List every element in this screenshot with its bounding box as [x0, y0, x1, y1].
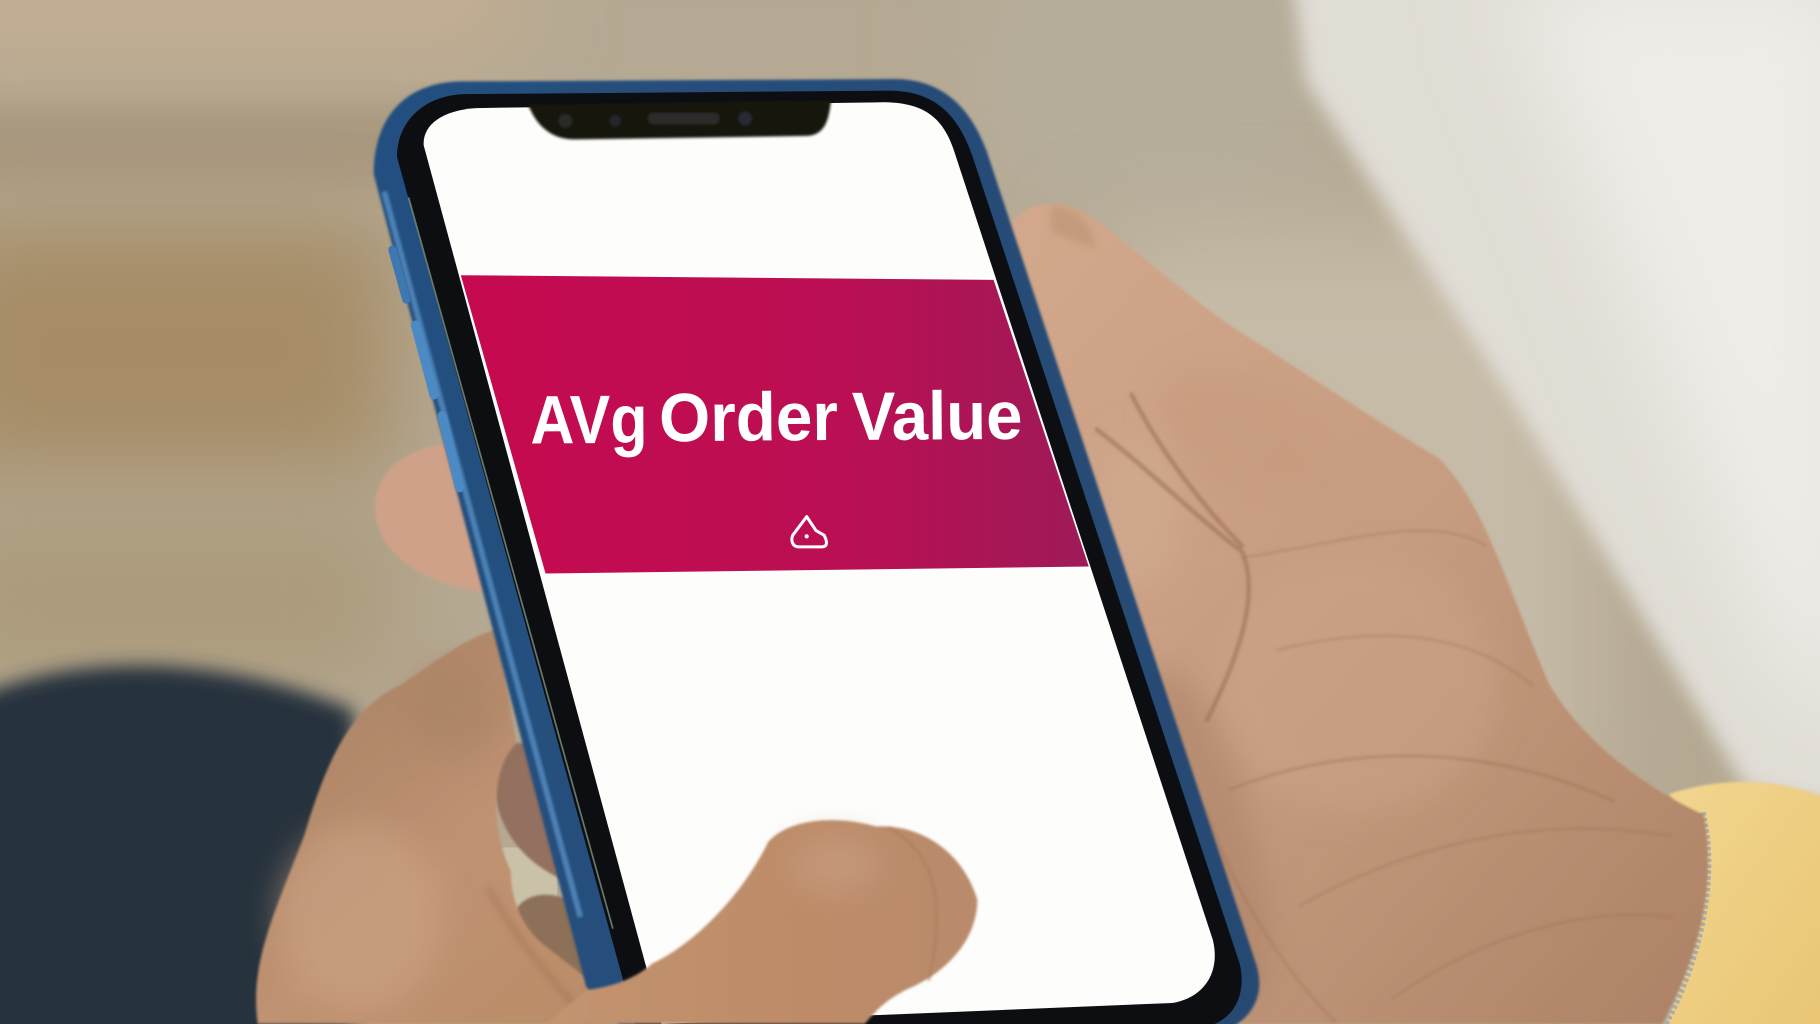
side highlight	[384, 192, 580, 917]
bezel reflection	[409, 197, 613, 929]
notch	[528, 100, 831, 139]
black bezel	[397, 91, 1242, 1024]
left hand	[256, 629, 720, 1024]
phone body	[374, 79, 1259, 1024]
lower fingers behind phone	[494, 743, 592, 987]
sleeve: yellow cuff	[1662, 782, 1820, 1024]
right hand	[998, 204, 1708, 1024]
palm creases	[1097, 395, 1671, 1022]
hand shading	[1091, 339, 1497, 1016]
banner title: Order	[659, 378, 838, 456]
crimson banner	[461, 275, 1089, 574]
banner title	[530, 377, 1023, 459]
thumb over screen	[546, 820, 977, 1024]
left index fingertip behind phone	[375, 443, 488, 592]
side buttons	[392, 250, 406, 300]
dark trousers, lower left	[0, 666, 354, 1024]
screen	[424, 102, 1215, 1024]
icon: tag outline	[792, 517, 826, 547]
banner title: Value	[852, 377, 1023, 455]
phone	[374, 79, 1259, 1024]
banner title: AVg	[530, 381, 648, 459]
